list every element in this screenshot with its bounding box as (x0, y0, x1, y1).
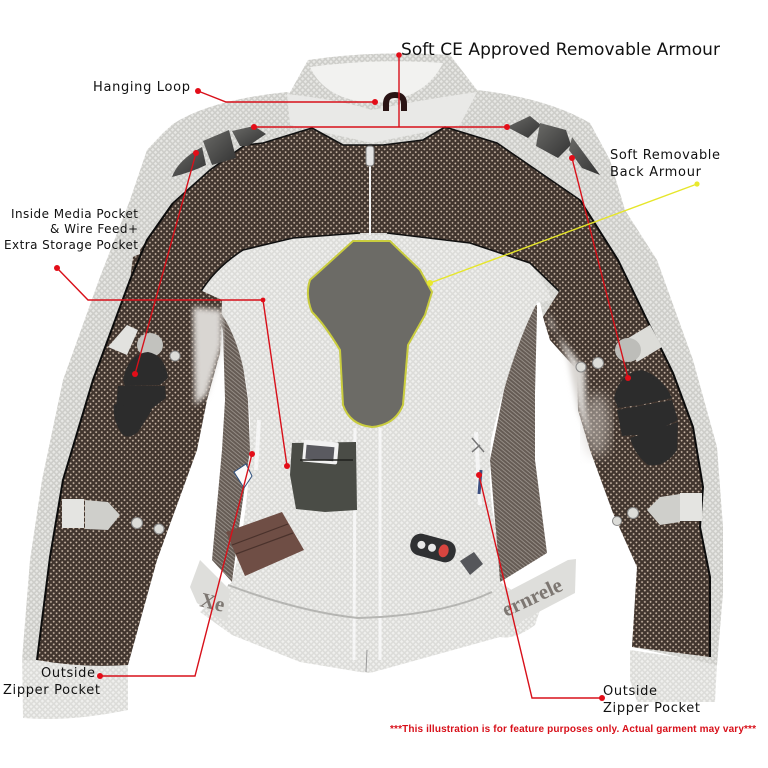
collar (260, 53, 500, 140)
shoulders and upper chest (150, 90, 610, 235)
left forearm buckle (85, 500, 120, 530)
label: soft removable back armour: Back Armour (610, 165, 702, 180)
yoke lower edge (200, 233, 560, 293)
left forearm strap (62, 499, 84, 528)
label: hanging loop: Hanging Loop (93, 80, 190, 95)
brown yoke (140, 127, 625, 300)
right forearm buckle (647, 494, 680, 525)
label: left zipper pocket (3, 666, 100, 698)
right elbow armour (614, 370, 678, 465)
left snaps (132, 351, 180, 534)
centre placket (354, 428, 380, 660)
label: media pocket: & Wire Feed+ (50, 222, 138, 236)
media pocket (290, 442, 357, 512)
right pocket zipper (476, 432, 480, 505)
label: soft removable back armour: Soft Removable (610, 148, 720, 163)
label: right zipper pocket: Zipper Pocket (603, 701, 700, 716)
back armour callout line (430, 184, 697, 283)
right snaps (576, 358, 638, 526)
zipper pull (366, 146, 374, 166)
left elbow armour (114, 352, 168, 437)
callout lines (57, 55, 628, 698)
right strap logo: ernrele (498, 573, 566, 622)
label: soft removable back armour (610, 148, 720, 180)
cord (479, 470, 481, 494)
centre zipper (369, 150, 371, 235)
right cuff (630, 650, 717, 702)
left side panel (202, 293, 250, 582)
wallet (226, 512, 304, 576)
right sleeve piping (580, 200, 710, 657)
label: media pocket (4, 207, 138, 252)
left sleeve (22, 124, 230, 665)
collar interior (310, 61, 443, 103)
pocket opening (300, 459, 353, 461)
label: right zipper pocket (603, 684, 700, 716)
label: media pocket: Extra Storage Pocket (4, 238, 138, 252)
right inner arm fade (583, 393, 611, 457)
left cuff (22, 650, 128, 719)
left sleeve piping (37, 203, 173, 660)
right zipper slider (472, 438, 484, 452)
key fob (408, 531, 458, 565)
hanging loop icon (386, 95, 404, 111)
right forearm strap (680, 493, 702, 521)
chest seam strip (287, 92, 477, 143)
back armour dots (427, 181, 700, 286)
left strap logo: Xe (198, 588, 227, 617)
label: right zipper pocket: Outside (603, 684, 657, 699)
jacket (22, 53, 723, 719)
key (460, 552, 483, 575)
left pocket zipper (256, 420, 259, 470)
phone (302, 440, 339, 465)
yoke upper edge (173, 127, 580, 203)
label: left zipper pocket: Outside (41, 666, 95, 681)
left arm buckle upper (137, 333, 163, 357)
right side panel (490, 303, 547, 582)
left sleeve mesh panel (37, 240, 222, 666)
hem slit (366, 650, 367, 672)
right sleeve mesh panel (543, 247, 710, 657)
left shoulder armour (172, 126, 266, 177)
right strap (498, 559, 576, 627)
back armour (308, 241, 432, 427)
hem seam (228, 585, 492, 618)
torso (195, 228, 552, 673)
disclaimer: ***This illustration is for feature purposes only. Actual garment may vary*** (390, 724, 756, 735)
left elbow highlight (193, 307, 222, 405)
left arm strap (108, 325, 138, 355)
label: soft CE armour: Soft CE Approved Removable Armour (401, 40, 720, 60)
right arm strap (625, 325, 662, 362)
callout dots (54, 52, 631, 701)
label: left zipper pocket: Zipper Pocket (3, 683, 100, 698)
right sleeve (530, 123, 723, 665)
right elbow highlight (548, 312, 590, 440)
label: media pocket: Inside Media Pocket (11, 207, 138, 221)
right shoulder armour (507, 116, 600, 175)
pull tab left (234, 464, 252, 488)
left strap (190, 560, 230, 623)
right arm buckle (615, 338, 641, 362)
